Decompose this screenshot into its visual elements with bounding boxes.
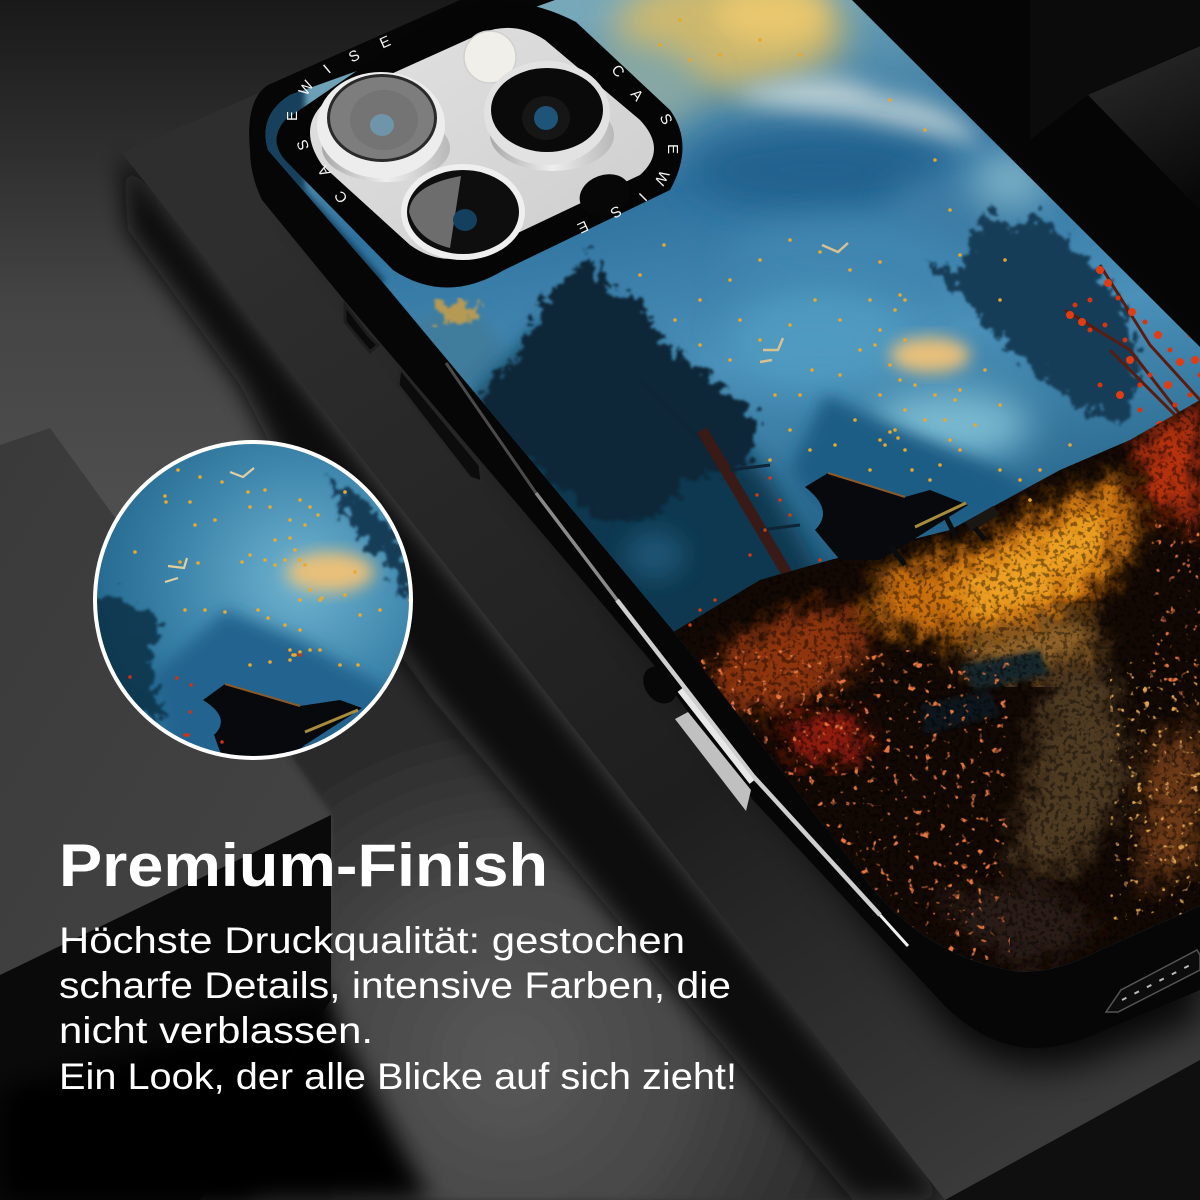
foliage ground bbox=[674, 400, 1200, 972]
flash bbox=[464, 31, 516, 83]
lens bottom bbox=[401, 164, 525, 260]
body text: Höchste Druckqualität: gestochen bbox=[59, 920, 685, 961]
left forest bbox=[468, 244, 826, 632]
brand text left: S bbox=[294, 137, 313, 152]
brand text right: E bbox=[664, 144, 681, 154]
brand text right: S bbox=[656, 111, 675, 127]
body text: nicht verblassen. bbox=[59, 1010, 373, 1051]
circle: white ring bbox=[95, 442, 411, 758]
brand text left: I bbox=[320, 62, 334, 77]
mid blue mass behind piano bbox=[790, 395, 1040, 530]
circle: right trees bbox=[328, 478, 420, 600]
brand text left: W bbox=[295, 77, 318, 99]
body text: Ein Look, der alle Blicke auf sich zieht! bbox=[59, 1056, 737, 1097]
background: dark side of main block bbox=[122, 153, 945, 1200]
brand text right: S bbox=[607, 202, 624, 221]
brand text left bbox=[284, 33, 393, 206]
right trees bbox=[925, 205, 1140, 425]
background: lower left block top bbox=[0, 428, 331, 975]
title: Premium-Finish bbox=[59, 832, 548, 899]
brand text left: E bbox=[284, 111, 301, 121]
island window bbox=[310, 28, 654, 259]
lens top left bbox=[317, 72, 450, 182]
circle: left trees bbox=[90, 595, 165, 720]
island ring bbox=[276, 1, 682, 287]
side button: camera control hole bbox=[345, 305, 378, 352]
phone case body bbox=[249, 0, 1200, 1048]
phone edge highlight bbox=[446, 363, 908, 946]
lens top right bbox=[484, 61, 614, 171]
clouds and sky glow bbox=[400, 0, 1050, 460]
dark sliver around camera bbox=[266, 88, 386, 284]
background: top right dark corner bbox=[860, 0, 1200, 360]
brand text left: A bbox=[315, 162, 334, 179]
brand text right: E bbox=[575, 217, 591, 236]
body text: scharfe Details, intensive Farben, die bbox=[59, 965, 731, 1006]
body text bbox=[59, 920, 737, 1097]
gold dust bbox=[640, 20, 1070, 500]
circle: glow bbox=[286, 552, 374, 592]
brand text left: C bbox=[331, 187, 352, 206]
background: lit face bbox=[250, 600, 853, 1200]
phone back painting bbox=[250, 0, 1200, 1000]
circle: darker blue mass bbox=[150, 610, 390, 760]
side button: long slot bbox=[398, 368, 482, 482]
silver side button bbox=[636, 660, 752, 811]
background: bottom right base bbox=[945, 1060, 1200, 1200]
red branches bbox=[1065, 265, 1200, 440]
phone shadow bbox=[300, 100, 1200, 1068]
piano bbox=[805, 473, 1000, 565]
brand text right bbox=[575, 62, 681, 236]
background: black shadow triangle bbox=[0, 815, 430, 1200]
zoom circle detail bbox=[90, 440, 420, 765]
circle: gold dust bbox=[133, 468, 409, 667]
bottom speaker slot bbox=[1106, 950, 1200, 1012]
brand text right: A bbox=[627, 86, 646, 105]
brand text right: I bbox=[635, 189, 650, 204]
birds bbox=[760, 243, 848, 362]
circle: birds bbox=[165, 468, 254, 582]
brand text right: W bbox=[650, 168, 672, 189]
camera island bbox=[276, 1, 682, 287]
brand text left: E bbox=[377, 33, 393, 52]
brand text left: S bbox=[346, 47, 363, 66]
microphone hole bbox=[574, 167, 636, 223]
circle: piano bbox=[203, 684, 362, 765]
brand text right: C bbox=[608, 62, 628, 81]
